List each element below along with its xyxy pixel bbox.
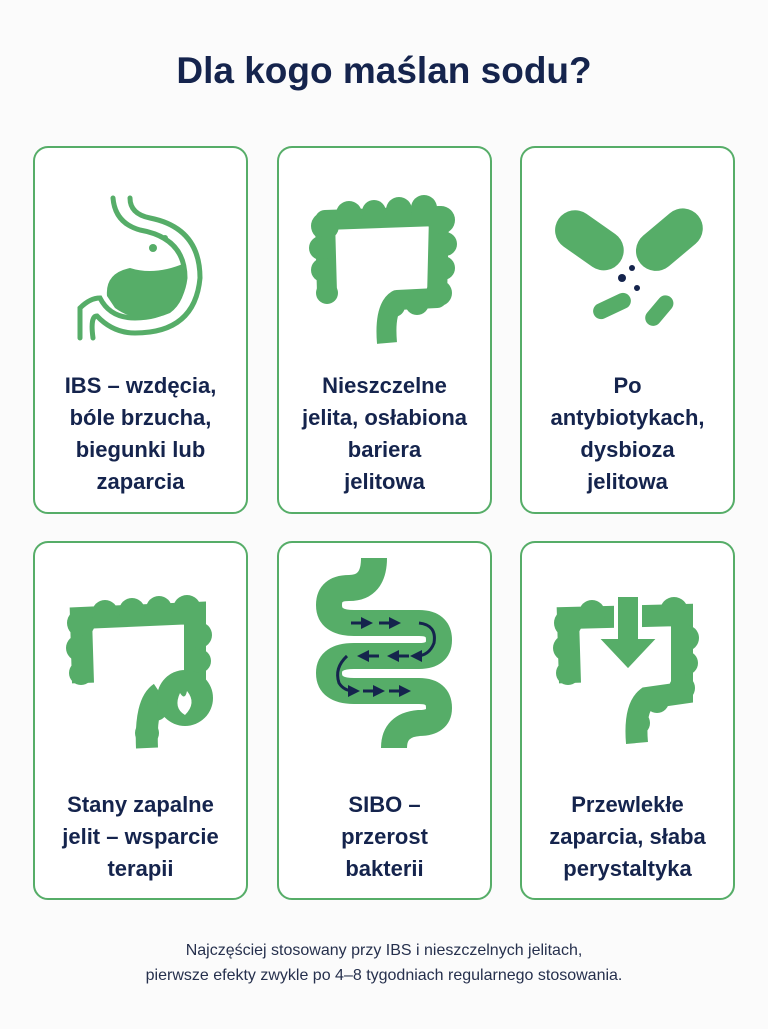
label <box>550 373 705 494</box>
label: jelitowa <box>587 469 668 494</box>
footer note <box>146 942 622 984</box>
footer note: Najczęściej stosowany przy IBS i nieszczelnych jelitach, <box>186 942 582 959</box>
panel: SIBO <box>277 541 492 900</box>
label <box>341 792 428 881</box>
label: jelit – wsparcie <box>62 824 219 849</box>
panel: constipation <box>520 541 735 900</box>
label: Przewlekłe <box>571 792 684 817</box>
label: antybiotykach, <box>550 405 705 430</box>
label: zaparcia, słaba <box>549 824 706 849</box>
label: Nieszczelne <box>322 373 447 398</box>
footer note: pierwsze efekty zwykle po 4–8 tygodniach regularnego stosowania. <box>146 967 622 984</box>
label: bakterii <box>345 856 424 881</box>
panel: antibiotics <box>520 146 735 514</box>
label: zaparcia <box>96 469 185 494</box>
panel: IBS <box>33 146 248 514</box>
icon: colon with down arrow <box>553 597 699 744</box>
label <box>62 792 219 881</box>
icon: colon with flame <box>66 595 213 748</box>
label: przerost <box>341 824 428 849</box>
label <box>65 373 216 494</box>
icon: capsule and bacteria <box>555 208 703 326</box>
label: jelitowa <box>344 469 425 494</box>
icon: colon <box>309 195 457 344</box>
label: SIBO – <box>348 792 421 817</box>
label: Stany zapalne <box>67 792 214 817</box>
label: Po <box>613 373 642 398</box>
icon: stomach <box>78 196 202 340</box>
label: jelita, osłabiona <box>302 405 467 430</box>
label: IBS – wzdęcia, <box>65 373 216 398</box>
title: Dla kogo maślan sodu? <box>176 50 592 91</box>
panel: inflammation <box>33 541 248 900</box>
label: terapii <box>107 856 174 881</box>
label <box>302 373 468 494</box>
label: dysbioza <box>580 437 675 462</box>
label: bóle brzucha, <box>70 405 211 430</box>
label: biegunki lub <box>76 437 205 462</box>
label: bariera <box>348 437 421 462</box>
label: perystaltyka <box>563 856 692 881</box>
icon: small intestine arrows <box>316 558 452 748</box>
panel: leaky gut <box>277 146 492 514</box>
label <box>549 792 706 881</box>
